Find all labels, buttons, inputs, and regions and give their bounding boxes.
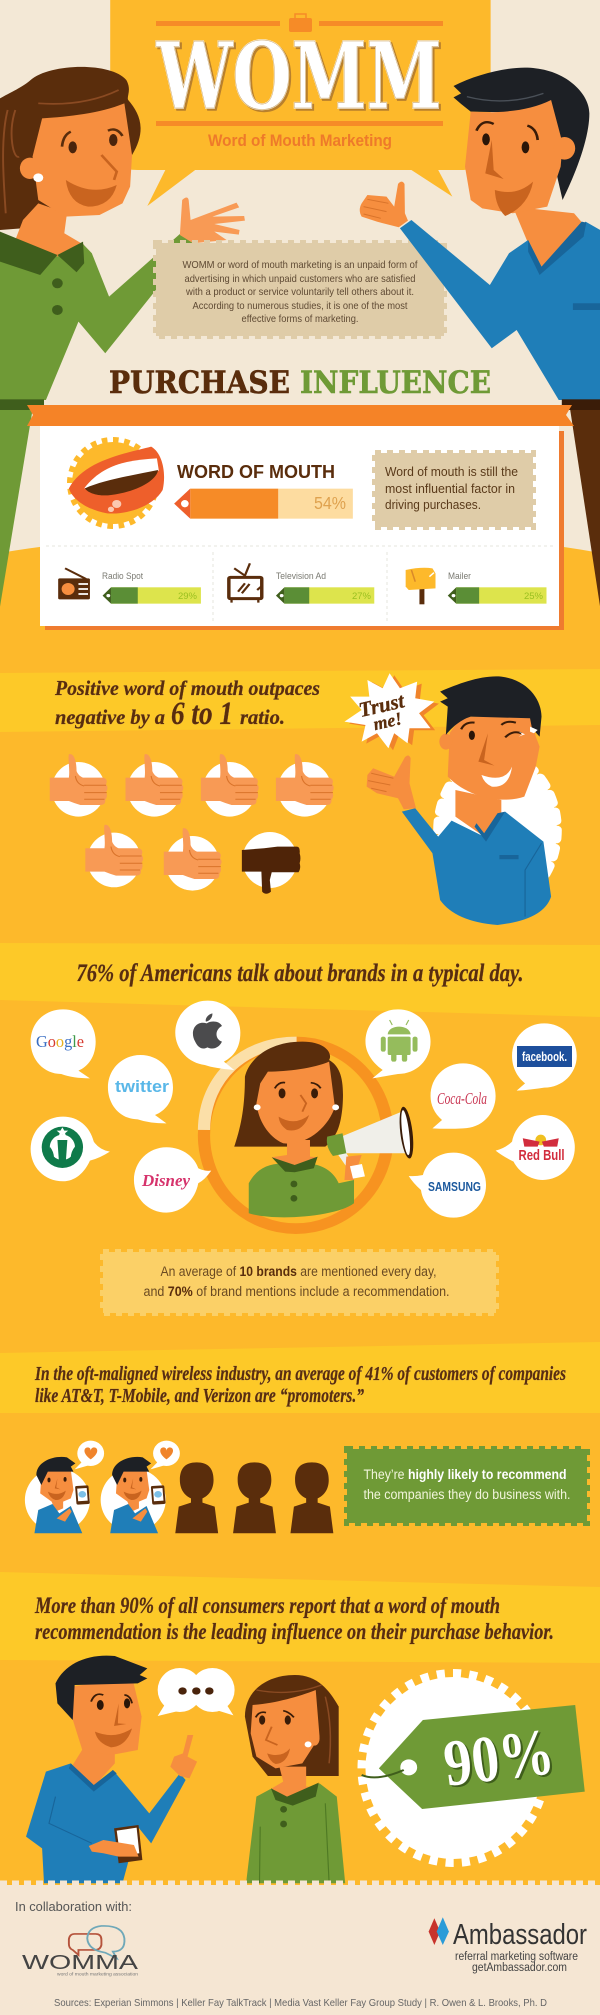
intro text panel: According to numerous studies, it is one of the most (192, 301, 408, 312)
title ornament rules and briefcase (156, 14, 443, 126)
thumb up 1 (50, 754, 108, 817)
intro text panel: WOMM or word of mouth marketing is an unpaid form of (182, 260, 418, 271)
bubble: Samsung (409, 1153, 486, 1218)
mailer: Mailer (448, 571, 471, 581)
bubble: Red Bull: Red Bull (518, 1148, 564, 1164)
pointing hand (170, 1735, 197, 1778)
radio spot (58, 568, 201, 604)
bubble: Apple (175, 1001, 240, 1070)
winking man's thumbs-up hand (367, 756, 416, 809)
heading: wireless industry: like AT&T, T-Mobile, and Verizon are “promoters.” (35, 1386, 364, 1407)
bubble: Facebook (512, 1023, 577, 1091)
word of mouth note (375, 453, 533, 527)
word of mouth bar 54% (174, 489, 353, 519)
bubble: Google: Google (36, 1032, 84, 1051)
intro text panel: effective forms of marketing. (242, 314, 358, 325)
WOMMA logo: WOMMA (22, 1952, 139, 1974)
header speech bubble (110, 0, 491, 206)
word of mouth note: Word of mouth is still the (385, 464, 518, 479)
intro text panel (156, 243, 444, 336)
intro text panel: advertising in which unpaid customers who are satisfied (184, 274, 416, 285)
collaboration label: In collaboration with: (15, 1900, 132, 1914)
five people icons: two promoters, three silhouettes (25, 1441, 333, 1533)
Ambassador logo (429, 1917, 587, 1974)
heading: purchase influence: PURCHASE (109, 365, 290, 401)
title WOMM: WOMM (158, 24, 443, 132)
speech bubble with dots (158, 1668, 235, 1716)
silhouette 3 (290, 1462, 333, 1533)
thumb up 5 (85, 825, 143, 887)
90% badge and price tag: 90% (442, 1717, 560, 1803)
word of mouth note: driving purchases. (385, 497, 481, 512)
man character, top right (360, 68, 600, 400)
promoters note: They’re highly likely to recommend (364, 1467, 566, 1482)
mouth badge (69, 442, 164, 524)
purchase influence card (27, 405, 574, 630)
promoter 1 (25, 1441, 104, 1533)
television ad (229, 563, 374, 604)
Ambassador logo: referral marketing software (455, 1951, 578, 1963)
silhouette 1 (175, 1462, 218, 1533)
heading: 90 percent: More than 90% of all consumers report that a word of mouth (34, 1593, 500, 1618)
bubble: Google (31, 1009, 96, 1078)
bubble: Disney (134, 1147, 211, 1213)
bubble: Twitter: twitter (115, 1077, 169, 1096)
thumb up 3 (201, 754, 259, 817)
intro text panel: with a product or service voluntarily tell others about it. (185, 287, 414, 298)
man with phone, bottom (26, 1656, 197, 1883)
word of mouth bar 54%: 54% (314, 493, 346, 513)
heading: 6 to 1 ratio: ratio. (240, 705, 285, 729)
bubble: Android (365, 1009, 431, 1078)
megaphone (327, 1106, 416, 1180)
mailer (406, 568, 546, 604)
bubble: Red Bull (496, 1115, 575, 1180)
thumb up 2 (126, 754, 183, 817)
background: yellow field with hill (0, 533, 600, 1885)
radio spot: Radio Spot (102, 571, 143, 581)
thumb up 6 (164, 828, 222, 891)
footer panel (0, 1883, 600, 2015)
90% badge and price tag (362, 1676, 585, 1860)
television ad: 27% (352, 591, 372, 602)
heading: 6 to 1 ratio: Positive word of mouth outpaces (54, 676, 320, 700)
heading: 6 to 1 ratio: 6 to 1 (171, 696, 233, 732)
woman character, top left (0, 67, 245, 400)
promoters note: the companies they do business with. (364, 1487, 570, 1502)
heading: 6 to 1 ratio (54, 676, 320, 732)
woman, bottom (245, 1675, 345, 1883)
promoter 2 (101, 1441, 180, 1533)
bubble: Coca-Cola: Coca-Cola (437, 1089, 487, 1108)
television ad: Television Ad (276, 571, 326, 581)
winking man with trust me burst (344, 673, 557, 925)
title WOMM: WOMM (156, 22, 441, 130)
bubble: Facebook: facebook. (522, 1049, 567, 1064)
heading: wireless industry (34, 1364, 566, 1407)
subtitle: Word of Mouth Marketing (208, 132, 392, 150)
brands stat panel: An average of 10 brands are mentioned every day, (160, 1264, 436, 1279)
thumb down (242, 832, 300, 894)
WOMMA logo (22, 1926, 139, 1976)
silhouette 2 (233, 1462, 276, 1533)
sources: Sources: Experian Simmons | Keller Fay TalkTrack | Media Vast Keller Fay Group Study | R. Owen & L. Brooks, Ph. D (54, 1997, 547, 2009)
title WOMM: WOMM (156, 22, 441, 130)
man's thumbs-up hand (360, 182, 408, 227)
ribbon (27, 405, 574, 426)
promoters note (347, 1449, 587, 1523)
thumb up 4 (276, 754, 334, 817)
bubble: Samsung: SAMSUNG (428, 1180, 481, 1194)
word of mouth label: WORD OF MOUTH (177, 461, 335, 482)
thumbs icons: six up, one down (50, 754, 334, 894)
purchase influence side strips (0, 399, 600, 607)
WOMMA logo: word of mouth marketing association (57, 1972, 139, 1976)
bubble: Coca-Cola (431, 1063, 496, 1129)
bubble: Starbucks (31, 1117, 110, 1181)
heading: purchase influence: INFLUENCE (300, 365, 491, 401)
trust me burst (344, 673, 439, 750)
brand speech bubbles (31, 1001, 577, 1218)
trust me burst: Trust (356, 688, 408, 722)
brands stat panel (103, 1252, 496, 1313)
section band: 90 percent (0, 1572, 600, 1663)
section band: wireless industry (0, 1342, 600, 1413)
heading: 6 to 1 ratio: negative by a (55, 705, 165, 729)
section band: Americans talk about brands (0, 943, 600, 1017)
woman's open hand (180, 197, 245, 243)
section band: positive word of mouth (0, 669, 600, 732)
radio spot: 29% (178, 591, 198, 602)
Ambassador logo: getAmbassador.com (472, 1962, 567, 1974)
bubble: Twitter (108, 1055, 173, 1123)
90% badge and price tag: 90% (440, 1715, 558, 1801)
smartphone (89, 1825, 142, 1863)
bubble: Disney: Disney (141, 1171, 190, 1190)
megaphone woman in ring (204, 1042, 416, 1229)
heading: purchase influence (109, 365, 491, 401)
heading: 90 percent (34, 1593, 554, 1644)
brands stat panel: and 70% of brand mentions include a recommendation. (144, 1284, 450, 1299)
trust me burst: me! (371, 708, 404, 734)
word of mouth note: most influential factor in (385, 481, 515, 496)
mailer: 25% (524, 591, 544, 602)
